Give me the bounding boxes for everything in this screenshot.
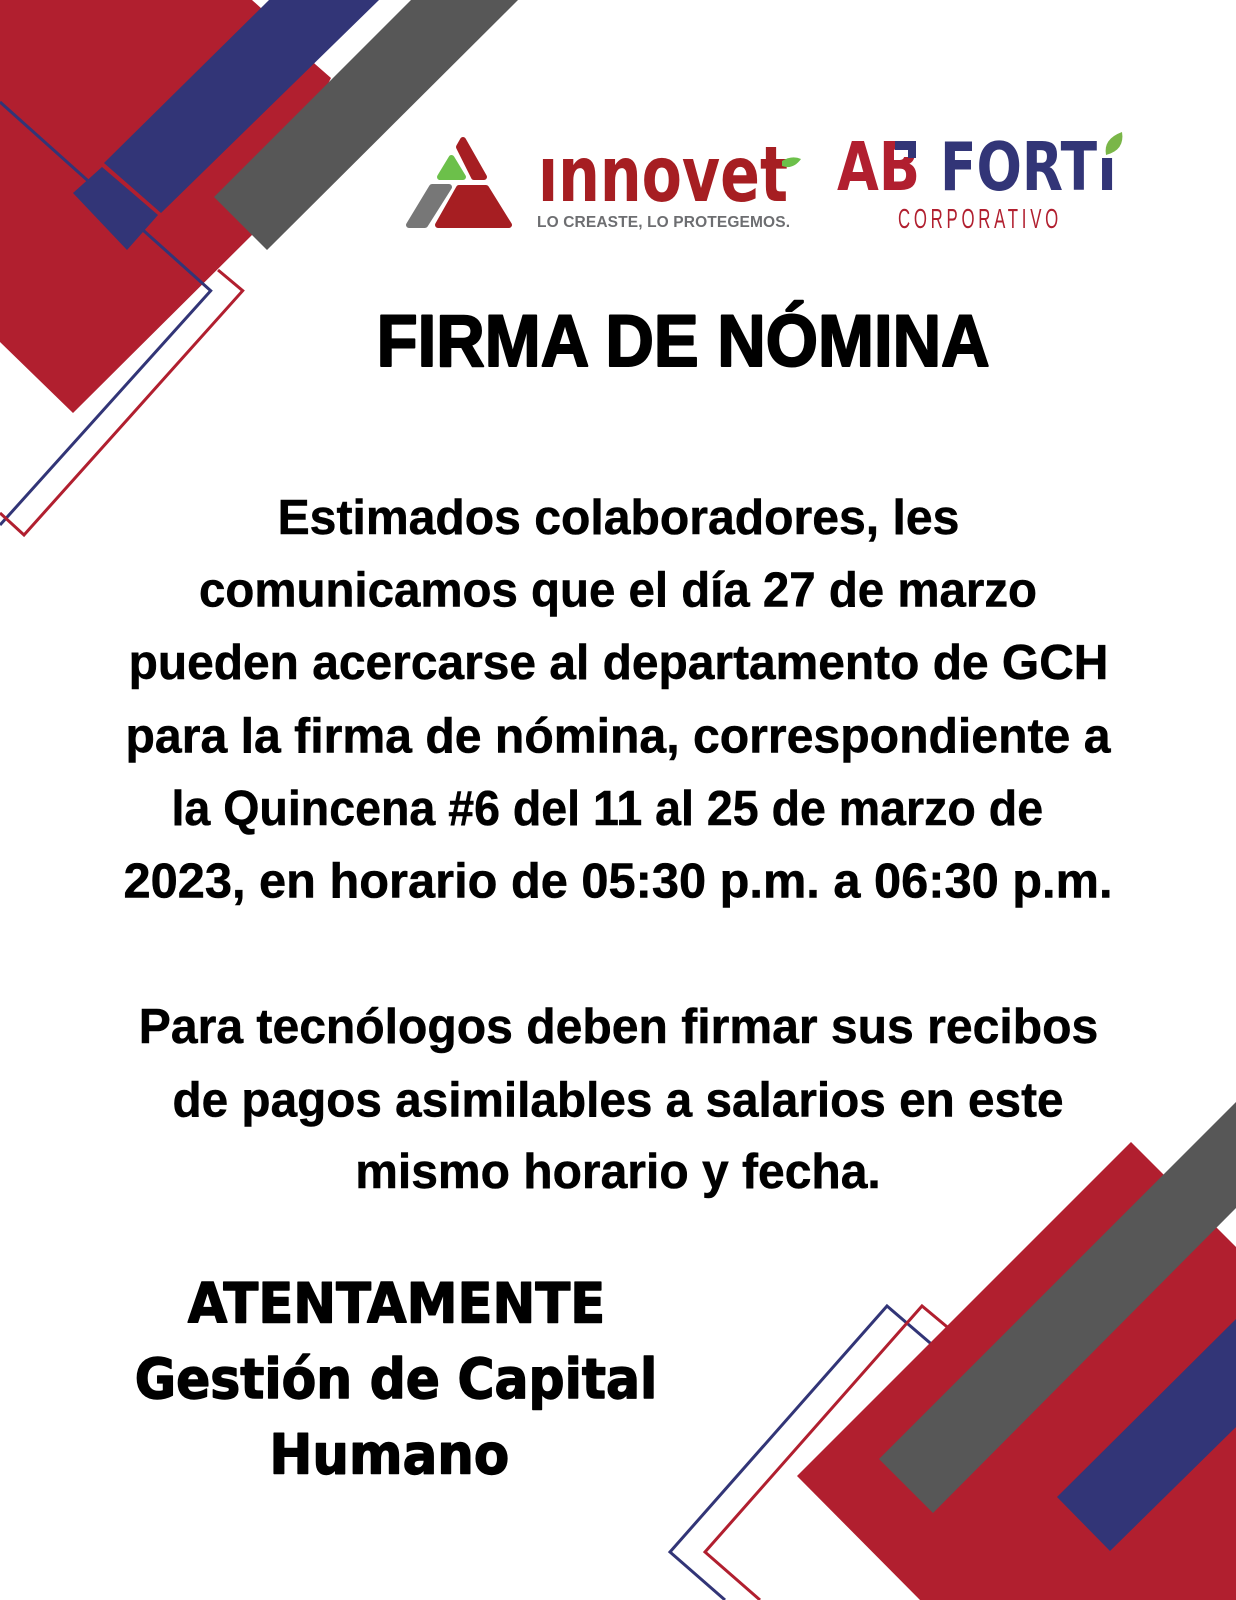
text block: signature: ATENTAMENTE: [188, 1272, 605, 1336]
text block: main announcement: la Quincena #6 del 11 al 25 de marzo de: [172, 782, 1043, 836]
text block: signature: Humano: [269, 1423, 509, 1487]
text block: technologists note: Para tecnólogos deben firmar sus recibos: [139, 1000, 1098, 1054]
decoration: top-left geometric shapes: [0, 0, 518, 535]
icon: innovet triangle: [409, 140, 509, 225]
logo: AB Forti corporativo: FORTI: [940, 128, 1117, 206]
text block: main announcement: [124, 491, 1112, 908]
text block: signature: Gestión de Capital: [135, 1347, 657, 1411]
wordmark: innovet: innovet: [538, 131, 788, 220]
logo: AB Forti corporativo: [837, 128, 1122, 234]
text block: signature: [135, 1272, 657, 1487]
text block: main announcement: pueden acercarse al departamento de GCH: [129, 636, 1108, 690]
text block: technologists note: [139, 1000, 1098, 1199]
text block: main announcement: Estimados colaboradores, les: [278, 491, 959, 545]
text block: main announcement: para la firma de nómina, correspondiente a: [126, 710, 1111, 764]
logo: AB Forti corporativo: CORPORATIVO: [898, 203, 1058, 234]
logo: AB Forti corporativo: AB: [837, 128, 920, 206]
text block: technologists note: de pagos asimilables a salarios en este: [172, 1074, 1064, 1128]
tagline: LO CREASTE, LO PROTEGEMOS.: [537, 214, 790, 231]
text block: main announcement: comunicamos que el día 27 de marzo: [199, 564, 1037, 618]
decoration: bottom-right geometric shapes: [670, 1102, 1236, 1600]
title: FIRMA DE NÓMINA: [377, 301, 990, 382]
text block: technologists note: mismo horario y fecha.: [355, 1145, 881, 1199]
text block: main announcement: 2023, en horario de 05:30 p.m. a 06:30 p.m.: [124, 854, 1112, 908]
logo: innovet: [409, 130, 801, 231]
